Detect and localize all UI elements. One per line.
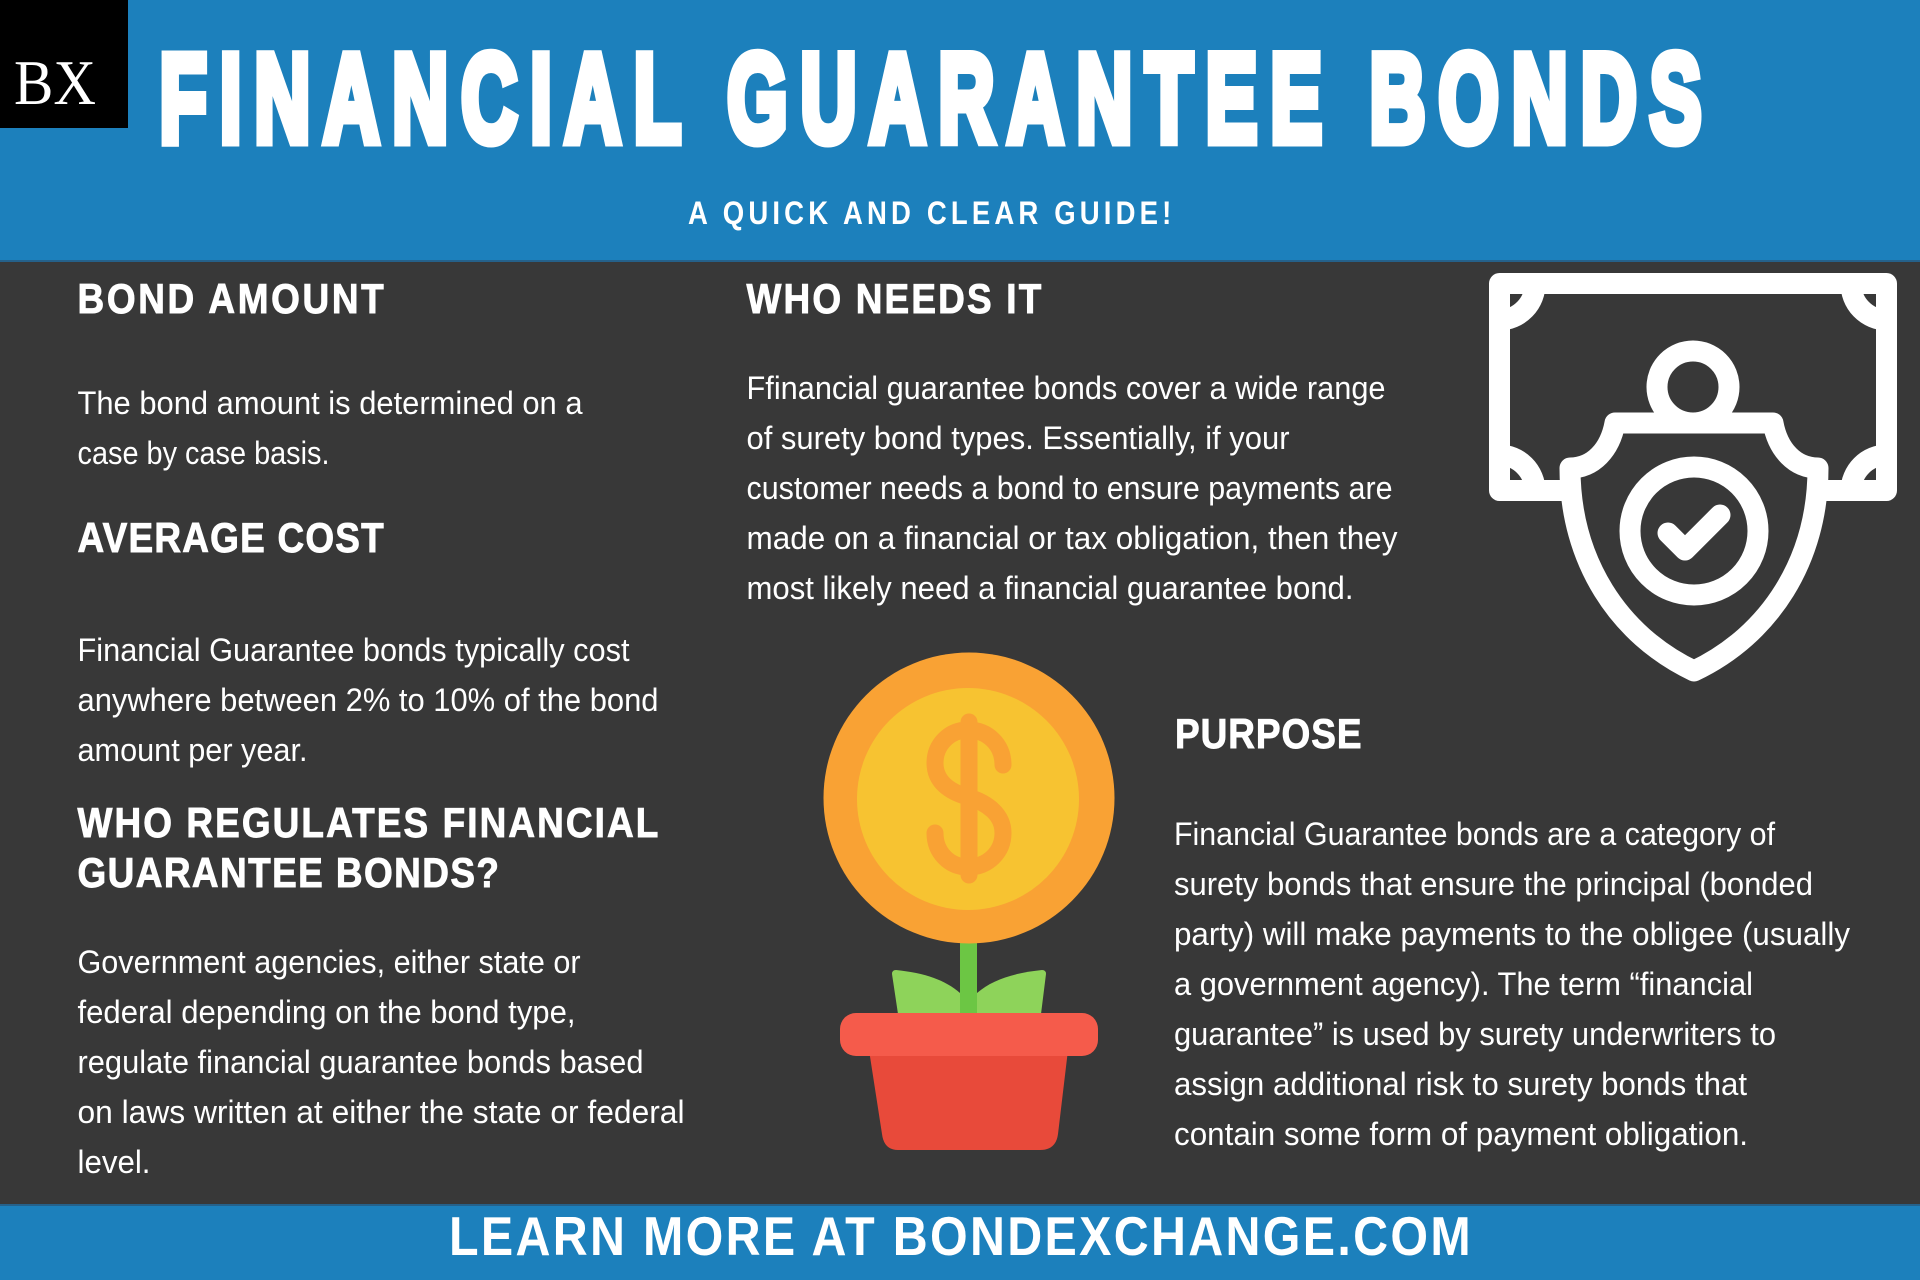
text: who regulates body: Government agencies, either state or	[78, 944, 581, 980]
text: purpose body: party) will make payments to the obligee (usually	[1174, 916, 1850, 952]
text: who regulates body: regulate financial guarantee bonds based	[78, 1044, 644, 1080]
header banner	[0, 0, 1920, 262]
logo: BX	[0, 0, 128, 128]
logo: BX: BX	[14, 47, 96, 118]
panel: who needs it	[746, 276, 1398, 606]
footer banner	[0, 1204, 1920, 1280]
heading: bond amount: BOND AMOUNT	[78, 276, 384, 323]
banknote outline	[1500, 284, 1886, 490]
text: who regulates body: federal depending on the bond type,	[78, 994, 576, 1030]
heading: who regulates: GUARANTEE BONDS?	[78, 850, 499, 897]
text: who needs it body: made on a financial or tax obligation, then they	[746, 520, 1398, 556]
text: who needs it body: of surety bond types. Essentially, if your	[746, 420, 1290, 456]
text: who regulates body: on laws written at either the state or federal	[78, 1094, 684, 1130]
pot body	[869, 1050, 1068, 1150]
text: who regulates body	[78, 944, 684, 1180]
text: average cost body: amount per year.	[78, 732, 308, 768]
heading: average cost: AVERAGE COST	[78, 515, 384, 562]
coin	[824, 652, 1114, 944]
text: who needs it body: most likely need a financial guarantee bond.	[746, 570, 1354, 606]
icon: money plant	[824, 652, 1114, 1150]
subtitle: A QUICK AND CLEAR GUIDE!	[688, 196, 1171, 232]
text: purpose body: assign additional risk to surety bonds that	[1174, 1066, 1747, 1102]
text: bond amount body	[78, 385, 583, 471]
icon: banknote with shield and check	[1500, 284, 1886, 671]
text: average cost body: anywhere between 2% to 10% of the bond	[78, 682, 658, 718]
text: average cost body: Financial Guarantee bonds typically cost	[78, 632, 630, 668]
panel: bond amount	[78, 276, 583, 471]
shield	[1570, 423, 1818, 671]
leaves	[892, 970, 1046, 1014]
panel: who regulates	[78, 800, 684, 1180]
title: FINANCIAL GUARANTEE BONDS	[160, 30, 1701, 169]
stem	[960, 940, 977, 1014]
text: bond amount body: case by case basis.	[78, 435, 330, 471]
text: purpose body: surety bonds that ensure the principal (bonded	[1174, 866, 1813, 902]
heading: who needs it: WHO NEEDS IT	[746, 276, 1041, 323]
text: purpose body	[1174, 816, 1850, 1152]
heading: who regulates	[78, 800, 658, 897]
footer call to action: LEARN MORE AT BONDEXCHANGE.COM	[449, 1205, 1471, 1267]
text: who needs it body: Ffinancial guarantee bonds cover a wide range	[746, 370, 1386, 406]
text: purpose body: guarantee” is used by surety underwriters to	[1174, 1016, 1776, 1052]
shield check circle	[1630, 467, 1758, 595]
heading: who regulates: WHO REGULATES FINANCIAL	[78, 800, 658, 847]
check mark	[1668, 515, 1720, 550]
text: who regulates body: level.	[78, 1144, 150, 1180]
text: purpose body: Financial Guarantee bonds are a category of	[1174, 816, 1775, 852]
panel: purpose	[1174, 711, 1850, 1152]
pot rim	[840, 1013, 1098, 1056]
text: who needs it body	[746, 370, 1398, 606]
text: who needs it body: customer needs a bond to ensure payments are	[746, 470, 1392, 506]
text: bond amount body: The bond amount is determined on a	[78, 385, 583, 421]
heading: purpose: PURPOSE	[1175, 711, 1362, 758]
dollar sign	[935, 722, 1003, 875]
panel: average cost	[78, 515, 658, 768]
text: purpose body: a government agency). The term “financial	[1174, 966, 1753, 1002]
text: purpose body: contain some form of payment obligation.	[1174, 1116, 1748, 1152]
text: average cost body	[78, 632, 658, 768]
